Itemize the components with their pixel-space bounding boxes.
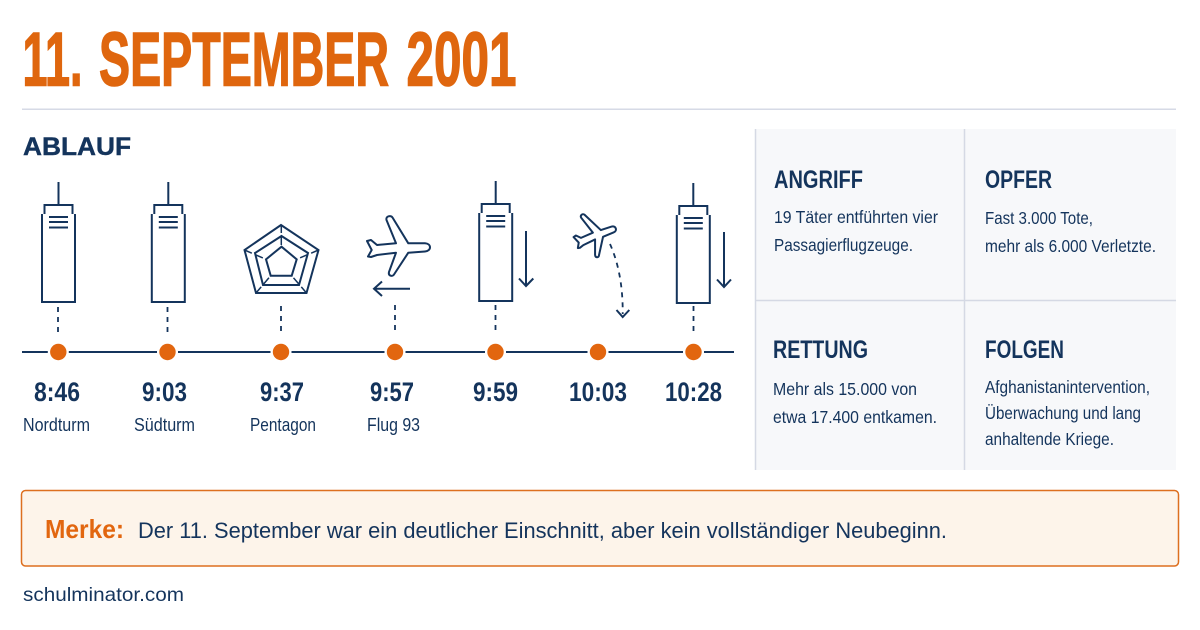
title: 2001 xyxy=(406,17,516,102)
arrow: left xyxy=(374,282,410,296)
times: 8:46 xyxy=(34,377,80,407)
times: 9:37 xyxy=(260,377,304,407)
panel: Angriff: Passagierflugzeuge. xyxy=(774,235,913,255)
time labels xyxy=(23,414,420,435)
connector dashes xyxy=(58,305,694,332)
callout: Merke: Merke: xyxy=(45,514,124,544)
time labels: Südturm xyxy=(134,414,195,435)
icon: north tower xyxy=(42,182,75,302)
title: SEPTEMBER xyxy=(99,17,389,102)
panel: Opfer xyxy=(985,166,1156,256)
times: 9:59 xyxy=(473,377,518,407)
panel: Angriff xyxy=(774,166,938,255)
footer: source: schulminator.com xyxy=(23,584,184,606)
times: 9:57 xyxy=(370,377,414,407)
time labels: Flug 93 xyxy=(367,414,420,435)
times: 10:28 xyxy=(665,377,722,407)
icon: south tower xyxy=(152,182,185,302)
timeline axis xyxy=(22,342,734,362)
panel: Folgen: Afghanistanintervention, xyxy=(985,377,1150,397)
panel: Folgen: Überwachung und lang xyxy=(985,403,1141,423)
icon: plane flight 93 xyxy=(367,216,430,276)
panel: Opfer: Fast 3.000 Tote, xyxy=(985,208,1093,228)
panel: Rettung: RETTUNG xyxy=(773,336,868,364)
time labels: Pentagon xyxy=(250,414,316,435)
times: 9:03 xyxy=(142,377,187,407)
panel: Angriff: 19 Täter entführten vier xyxy=(774,207,938,227)
panel: Rettung: Mehr als 15.000 von xyxy=(773,379,917,399)
panel: Opfer: mehr als 6.000 Verletzte. xyxy=(985,236,1156,256)
heading: Ablauf: ABLAUF xyxy=(23,133,131,161)
panel: Rettung: etwa 17.400 entkamen. xyxy=(773,407,937,427)
callout: Merke: Der 11. September war ein deutlicher Einschnitt, aber kein vollständiger Neubeginn. xyxy=(138,518,947,543)
panel: Folgen: anhaltende Kriege. xyxy=(985,429,1114,449)
panel: Rettung xyxy=(773,336,937,427)
icon: plane crash 10:03 xyxy=(568,206,629,317)
timeline chart xyxy=(22,181,734,435)
panel: Folgen xyxy=(985,336,1150,449)
times xyxy=(34,377,722,407)
panel: Angriff: ANGRIFF xyxy=(774,166,863,194)
time labels: Nordturm xyxy=(23,414,90,435)
icon: tower collapse 10:28 xyxy=(677,183,731,303)
panel: facts grid xyxy=(755,129,1176,470)
icon: pentagon xyxy=(244,225,318,293)
panel: Opfer: OPFER xyxy=(985,166,1052,194)
title: 11. xyxy=(22,17,82,102)
callout: Merke xyxy=(22,490,1178,566)
icon: tower collapse 9:59 xyxy=(479,181,533,301)
panel: Folgen: FOLGEN xyxy=(985,336,1064,364)
times: 10:03 xyxy=(569,377,627,407)
